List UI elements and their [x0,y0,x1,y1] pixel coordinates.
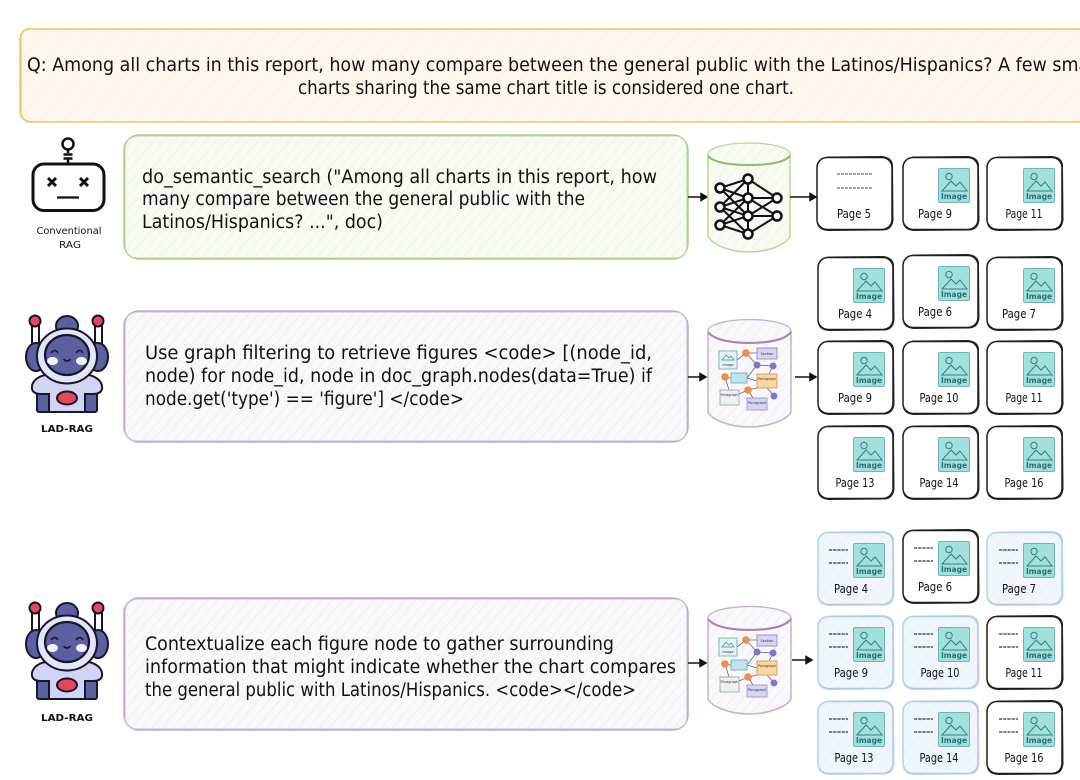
contextualize text: information that might indicate whether the chart compares [145,657,676,678]
query text [142,167,657,233]
card: Page 9 highlighted: Image [856,651,882,660]
icon: document graph database: Paragraph [758,377,776,381]
arrow: query to document graph [688,374,706,380]
card: Page 16: Image [1026,736,1052,745]
panel: LAD-RAG graph filtering [124,311,688,442]
question text: charts sharing the same chart title is considered one chart. [298,77,794,99]
card: Page 11: Image [1026,192,1052,201]
query text: Latinos/Hispanics? ...", doc) [142,212,383,233]
card: Page 9 highlighted [818,616,894,690]
card: Page 4 [818,256,894,330]
card: Page 4: Page 4 [838,307,872,321]
card: Page 10 [903,340,979,414]
icon: conventional RAG robot [33,138,104,210]
label: LAD-RAG: LAD-RAG [41,713,93,724]
card: Page 5 [817,156,893,230]
card: Page 7 highlighted [987,532,1063,606]
card: Page 11: Image [1026,651,1052,660]
card: Page 16: Image [1026,461,1052,470]
card: Page 9: Image [856,376,882,385]
card: Page 14: Image [941,461,967,470]
card: Page 7: Image [1026,292,1052,301]
icon: document graph database: Image [723,650,733,654]
icon: document graph database: Paragraph [748,401,766,405]
card: Page 14 highlighted [903,700,979,774]
card: Page 16 [987,700,1063,774]
contextualize text: the general public with Latinos/Hispanics. <code></code> [145,680,636,701]
card: Page 9: Page 9 [838,391,872,405]
icon: document graph database: Paragraph [721,680,738,684]
panel: LAD-RAG contextualize [124,598,688,730]
card: Page 14 highlighted: Image [941,736,967,745]
icon: document graph database: Section [760,352,774,356]
card: Page 13 highlighted [818,700,894,774]
arrow: document graph to context pages [792,656,812,664]
card: Page 13: Image [856,461,882,470]
icon: document graph database: Section [760,639,774,643]
label: LAD-RAG: LAD-RAG [41,424,93,435]
card: Page 9 highlighted: Page 9 [834,666,868,680]
card: Page 6: Page 6 [918,580,952,594]
card: Page 10: Page 10 [920,391,958,405]
card: Page 4 highlighted: Page 4 [834,582,868,596]
icon: neural network database [708,143,790,252]
graph filtering text: node) for node_id, node in doc_graph.nodes(data=True) if [145,366,652,387]
card: Page 16: Page 16 [1004,751,1044,765]
icon: document graph database: Paragraph [758,664,776,668]
card: Page 10: Image [941,376,967,385]
card: Page 11: Page 11 [1006,207,1042,221]
card: Page 14 [903,426,979,500]
card: Page 9 [903,156,979,230]
card: Page 6 [903,530,979,604]
icon: document graph database [708,320,791,427]
graph filtering text: Use graph filtering to retrieve figures <code> [(node_id, [145,343,652,364]
card: Page 4: Image [856,292,882,301]
icon: LAD-RAG robot [26,602,108,699]
card: Page 13: Page 13 [836,476,874,490]
card: Page 16 [987,426,1063,500]
graph filtering text [145,343,652,410]
card: Page 13 highlighted: Page 13 [834,751,874,765]
graph filtering text: node.get('type') == 'figure'] </code> [145,389,464,410]
card: Page 6: Page 6 [918,305,952,319]
arrow: document graph to figures [795,374,816,380]
query text: many compare between the general public with the [142,189,585,210]
card: Page 11: Image [1026,376,1052,385]
icon: document graph database: Paragraph [721,393,738,397]
card: Page 14 highlighted: Page 14 [920,751,958,765]
query text: do_semantic_search ("Among all charts in this report, how [142,167,657,188]
card: Page 5: Page 5 [837,207,871,221]
card: Page 7 highlighted: Image [1026,567,1052,576]
panel: question box [20,28,1080,122]
card: Page 11 [987,156,1063,230]
contextualize text: Contextualize each figure node to gather surrounding [145,634,614,655]
contextualize text [145,634,676,701]
question text [27,54,1080,99]
card: Page 7 [987,256,1063,330]
card: Page 13 highlighted: Image [856,736,882,745]
card: Page 10 highlighted [903,616,979,690]
card: Page 14: Page 14 [920,476,958,490]
card: Page 10 highlighted: Image [941,651,967,660]
arrow: vector store to retrieved pages [790,194,816,200]
card: Page 4 highlighted: Image [856,567,882,576]
card: Page 11 [987,616,1063,690]
icon: document graph database [708,606,791,714]
card: Page 4 highlighted [818,532,894,606]
card: Page 7: Page 7 [1002,307,1036,321]
card: Page 9: Image [941,192,967,201]
card: Page 11: Page 11 [1006,666,1042,680]
arrow: query to vector store [688,194,707,200]
icon: document graph database: Image [723,363,733,367]
card: Page 9: Page 9 [918,207,952,221]
arrow: query to document graph [688,660,706,666]
icon: document graph database: Paragraph [748,688,766,692]
card: Page 6: Image [941,290,967,299]
card: Page 6 [903,254,979,328]
card: Page 7 highlighted: Page 7 [1002,582,1036,596]
card: Page 10 highlighted: Page 10 [920,666,960,680]
card: Page 11: Page 11 [1006,391,1042,405]
card: Page 13 [818,426,894,500]
label: Conventional RAG: Conventional [36,226,102,237]
label: Conventional RAG: RAG [59,240,81,251]
card: Page 6: Image [941,565,967,574]
panel: conventional RAG query [124,135,688,259]
card: Page 11 [987,340,1063,414]
card: Page 9 [818,340,894,414]
icon: LAD-RAG robot [26,316,108,412]
card: Page 16: Page 16 [1004,476,1044,490]
label: Conventional RAG [36,226,102,251]
